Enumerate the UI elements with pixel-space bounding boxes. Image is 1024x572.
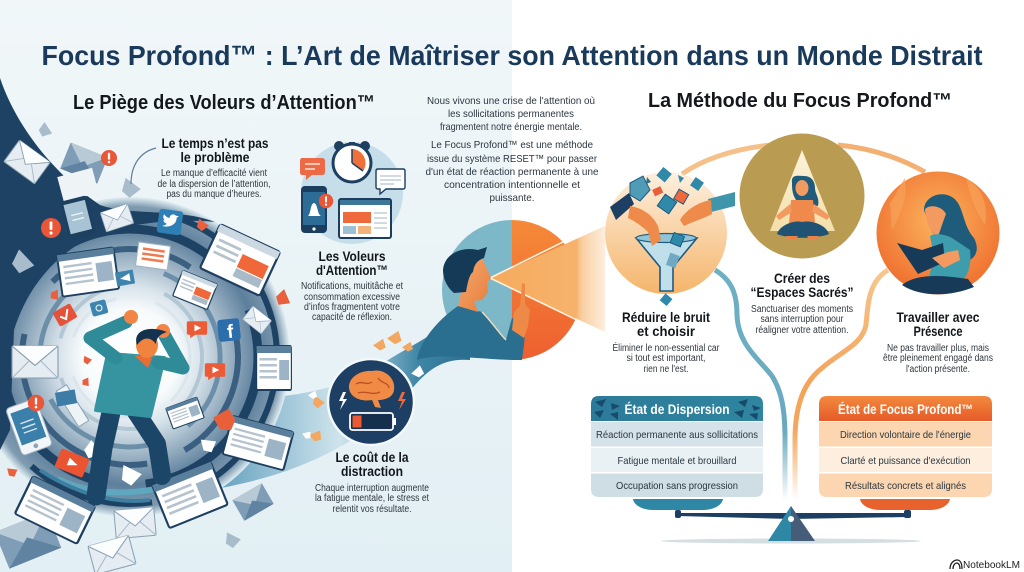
row 2: Clarté et puissance d'exécution bbox=[840, 455, 971, 467]
table: état de focus profond bbox=[819, 396, 992, 497]
text: les voleurs: Les Voleurs bbox=[318, 248, 386, 264]
intro text block: fragmentent notre énergie mentale. bbox=[440, 121, 582, 133]
text: le coût: Chaque interruption augmente bbox=[315, 483, 429, 494]
icon: alarm clock bbox=[333, 141, 371, 182]
illustration: funnel circle bbox=[605, 167, 735, 306]
text: espaces sacrés: Sanctuariser des moments bbox=[751, 304, 853, 315]
text: espaces sacrés: Créer des bbox=[774, 270, 830, 286]
cards falling bbox=[630, 167, 704, 306]
intro text block bbox=[426, 95, 599, 204]
table header: État de Dispersion bbox=[624, 402, 730, 417]
text: le coût: relentit vos résultate. bbox=[332, 504, 412, 515]
callout: le temps bbox=[131, 135, 270, 200]
row 3: Résultats concrets et alignés bbox=[845, 480, 966, 492]
table header: État de Focus Profond™ bbox=[838, 402, 973, 417]
text: travailler avec présence bbox=[883, 309, 993, 375]
main title: Focus Profond™ : L’Art de Maîtriser son Attention dans un Monde Distrait bbox=[42, 40, 982, 71]
table header bbox=[819, 396, 992, 421]
row 1 bbox=[819, 422, 992, 446]
callout: le temps: de la dispersion de l’attention, bbox=[158, 179, 270, 190]
intro text block: puissante. bbox=[490, 192, 534, 204]
confetti on the ribbon bbox=[302, 330, 426, 444]
hands bbox=[124, 310, 138, 324]
row 2 bbox=[819, 448, 992, 472]
row 1 bbox=[591, 422, 763, 446]
lightning bolts bbox=[339, 392, 347, 410]
text: les voleurs: capacité de réflexion. bbox=[312, 312, 392, 323]
callout: le temps: le problème bbox=[180, 149, 250, 165]
orange half circle bbox=[512, 220, 582, 360]
text: travailler avec présence: Travailler avec bbox=[896, 309, 980, 325]
reading woman bbox=[897, 194, 977, 294]
swirl bbox=[0, 197, 290, 517]
brain bbox=[349, 370, 394, 408]
text: travailler avec présence: Ne pas travailler plus, mais bbox=[887, 343, 989, 354]
illustration: reading circle bbox=[876, 172, 1000, 294]
calm man with focus beam bbox=[417, 220, 605, 360]
torso bbox=[96, 354, 164, 416]
neck and face bbox=[458, 258, 491, 312]
hands bbox=[610, 192, 735, 246]
focus beam bbox=[490, 226, 605, 332]
row 2: Fatigue mentale et brouillard bbox=[618, 455, 737, 467]
callout: le temps: Le temps n’est pas bbox=[162, 135, 269, 151]
figure: overwhelmed man bbox=[90, 310, 183, 496]
vortex illustration bbox=[0, 78, 318, 572]
text: le coût bbox=[315, 449, 429, 515]
callout: le temps: pas du manque d’heures. bbox=[166, 189, 262, 200]
icon: speech document bbox=[376, 169, 405, 194]
social icons: f bbox=[226, 322, 235, 343]
illustration: meditation circle bbox=[740, 134, 864, 258]
text: le coût: la fatigue mentale, le stress et bbox=[315, 493, 429, 504]
text: réduire le bruit: Réduire le bruit bbox=[622, 309, 710, 325]
balance scale bbox=[633, 499, 950, 544]
swoosh ribbon to the calm man bbox=[210, 335, 470, 490]
teal half circle bbox=[442, 220, 512, 360]
intro text block: les sollicitations permanentes bbox=[448, 108, 574, 120]
red and slate debris bbox=[7, 122, 292, 550]
heading: right section: La Méthode du Focus Profond™ bbox=[648, 90, 952, 112]
alert badges bbox=[28, 150, 117, 411]
legs bbox=[96, 408, 112, 496]
text: le coût: distraction bbox=[341, 463, 403, 479]
row 2 bbox=[591, 448, 763, 472]
neck and head bbox=[134, 355, 152, 368]
text: réduire le bruit bbox=[612, 309, 720, 375]
arms bbox=[90, 322, 126, 358]
pointing hand bbox=[512, 283, 530, 338]
intro text block: issue du système RESET™ pour passer bbox=[427, 153, 597, 165]
dark navy sweep bbox=[0, 78, 215, 450]
text: travailler avec présence: être pleinement engagé dans bbox=[883, 353, 993, 364]
text: travailler avec présence: Présence bbox=[914, 323, 963, 339]
text: espaces sacrés bbox=[750, 270, 854, 336]
icon: phone with bell bbox=[301, 186, 333, 233]
row 3 bbox=[591, 474, 763, 497]
text: les voleurs: consommation excessive bbox=[304, 292, 400, 303]
shirt bbox=[417, 306, 526, 360]
icon: brain and battery bbox=[328, 359, 414, 445]
social icons bbox=[52, 208, 241, 478]
table header bbox=[591, 396, 763, 421]
text: espaces sacrés: réaligner votre attention. bbox=[756, 325, 848, 336]
intro text block: d'un état de réaction permanente à une bbox=[426, 166, 599, 178]
text: les voleurs: d'Attention™ bbox=[316, 262, 388, 278]
meditating woman bbox=[776, 176, 830, 239]
envelopes bbox=[0, 140, 274, 572]
heading: left section: Le Piège des Voleurs d’Attention™ bbox=[73, 92, 375, 114]
text: réduire le bruit: Éliminer le non-essential car bbox=[612, 341, 720, 354]
table: état de dispersion bbox=[591, 396, 763, 497]
text: réduire le bruit: rien ne l'est. bbox=[644, 364, 688, 375]
funnel bbox=[636, 234, 697, 291]
text: les voleurs: Notifications, muititâche et bbox=[301, 281, 403, 292]
row 3: Occupation sans progression bbox=[616, 480, 738, 492]
icon: chat bubble bbox=[300, 158, 325, 180]
browser windows bbox=[15, 168, 294, 544]
text: le coût: Le coût de la bbox=[336, 449, 409, 465]
intro text block: concentration intentionnelle et bbox=[444, 179, 580, 191]
text: réduire le bruit: si tout est important, bbox=[626, 353, 706, 364]
connecting curves bbox=[682, 145, 925, 505]
icon: browser window bbox=[339, 199, 391, 238]
row 3 bbox=[819, 474, 992, 497]
text: espaces sacrés: “Espaces Sacrés” bbox=[750, 284, 854, 300]
notebooklm logo: NotebookLM bbox=[963, 559, 1020, 571]
text: les voleurs: d’infos fragmentent votre bbox=[304, 302, 400, 313]
icon: attention thieves cluster bbox=[300, 141, 405, 244]
row 1: Réaction permanente aus sollicitations bbox=[596, 429, 758, 441]
intro text block: Le Focus Profond™ est une méthode bbox=[431, 139, 593, 151]
callout: le temps: Le manque d’efficacité vient bbox=[161, 168, 267, 179]
hair bbox=[443, 247, 487, 293]
battery bbox=[350, 413, 396, 430]
row 1: Direction volontaire de l'énergie bbox=[840, 429, 971, 441]
text: travailler avec présence: l'action présente. bbox=[906, 364, 970, 375]
text: réduire le bruit: et choisir bbox=[637, 323, 696, 339]
text: espaces sacrés: sans interruption pour bbox=[760, 314, 844, 325]
phones bbox=[5, 195, 96, 456]
intro text block: Nous vivons une crise de l'attention où bbox=[427, 95, 595, 107]
text: les voleurs bbox=[301, 248, 403, 323]
